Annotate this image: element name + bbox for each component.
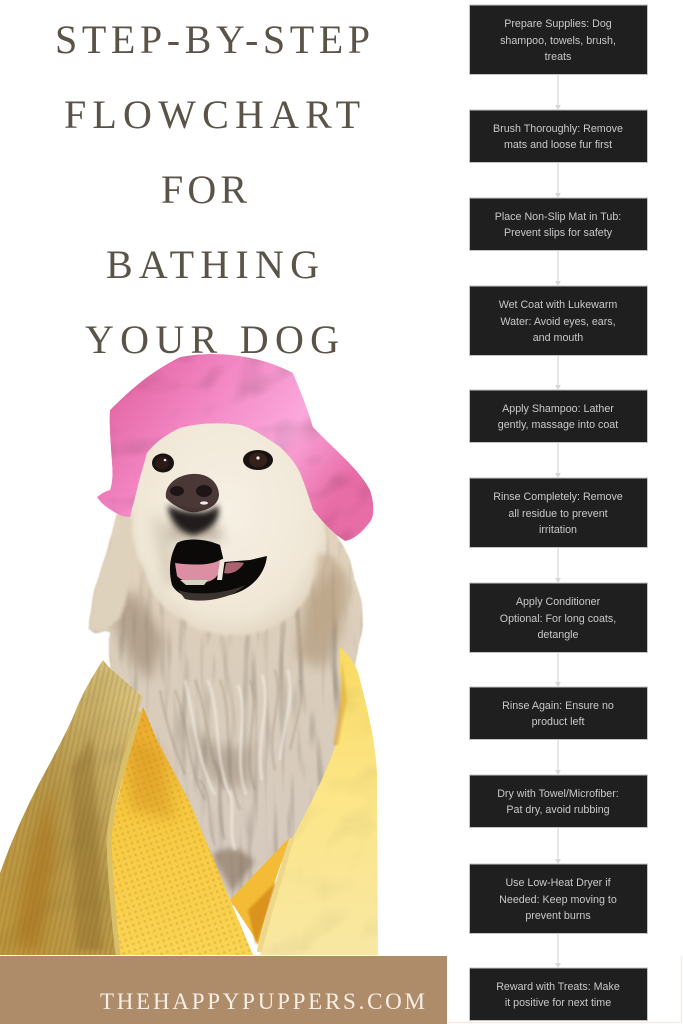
step 1: Prepare Supplies: Dog xyxy=(504,18,612,30)
step 5: Apply Shampoo: Lather xyxy=(502,403,614,415)
step 3 xyxy=(470,198,648,250)
arrow 4 xyxy=(555,356,561,390)
right towel xyxy=(260,647,378,955)
step 8 xyxy=(470,687,648,740)
shower cap xyxy=(97,354,373,541)
step 8: Rinse Again: Ensure no xyxy=(502,700,614,712)
arrow 1 xyxy=(555,75,561,110)
arrow 5 xyxy=(555,443,561,478)
nose xyxy=(166,474,219,535)
step 11: Reward with Treats: Make xyxy=(496,981,620,993)
step 1: treats xyxy=(545,51,571,63)
step 6: Rinse Completely: Remove xyxy=(493,491,623,503)
arrow 2 xyxy=(555,163,561,198)
fur body xyxy=(90,510,364,905)
step 4: and mouth xyxy=(533,332,583,344)
mouth xyxy=(170,539,267,601)
head xyxy=(92,404,350,640)
step 4: Water: Avoid eyes, ears, xyxy=(500,316,616,328)
title: YOUR DOG xyxy=(85,317,339,362)
title: STEP-BY-STEP xyxy=(55,17,370,62)
step 2: mats and loose fur first xyxy=(504,139,612,151)
footer band xyxy=(0,956,447,1024)
step 6 xyxy=(470,478,648,548)
illustration: dog in shower cap and yellow towel xyxy=(0,354,378,955)
step 11: it positive for next time xyxy=(505,997,611,1009)
left towel xyxy=(0,660,143,955)
step 10 xyxy=(470,864,648,934)
arrow 6 xyxy=(555,548,561,583)
step 2 xyxy=(470,110,648,162)
step 7: Optional: For long coats, xyxy=(500,613,616,625)
arrow 7 xyxy=(555,653,561,687)
step 7: Apply Conditioner xyxy=(516,596,601,608)
step 4: Wet Coat with Lukewarm xyxy=(499,299,617,311)
arrow 9 xyxy=(555,828,561,864)
step 2: Brush Thoroughly: Remove xyxy=(493,123,623,135)
step 10: prevent burns xyxy=(525,910,591,922)
step 9 xyxy=(470,775,648,828)
arrow 10 xyxy=(555,934,561,968)
title: FLOWCHART xyxy=(64,92,360,137)
step 5: gently, massage into coat xyxy=(498,419,618,431)
arrow 8 xyxy=(555,740,561,775)
title: BATHING xyxy=(106,242,319,287)
step 11 xyxy=(470,968,648,1020)
edge line xyxy=(448,956,682,1022)
step 7 xyxy=(470,583,648,652)
front yellow strap xyxy=(110,707,253,955)
step 3: Place Non-Slip Mat in Tub: xyxy=(495,211,621,223)
footer band: THEHAPPYPUPPERS.COM xyxy=(100,989,425,1014)
step 6: irritation xyxy=(539,524,577,536)
inner fold xyxy=(230,837,290,945)
step 1: shampoo, towels, brush, xyxy=(500,35,616,47)
step 10: Use Low-Heat Dryer if xyxy=(505,877,611,889)
right eye xyxy=(243,450,273,470)
step 3: Prevent slips for safety xyxy=(504,227,613,239)
step 4 xyxy=(470,286,648,356)
arrow 3 xyxy=(555,251,561,286)
step 6: all residue to prevent xyxy=(508,508,608,520)
left eye xyxy=(152,454,174,472)
step 10: Needed: Keep moving to xyxy=(499,894,617,906)
title: FOR xyxy=(161,167,247,212)
step 7: detangle xyxy=(537,629,579,641)
step 9: Dry with Towel/Microfiber: xyxy=(497,788,619,800)
title xyxy=(55,17,370,362)
step 9: Pat dry, avoid rubbing xyxy=(506,804,610,816)
towel xyxy=(0,647,378,955)
flowchart xyxy=(470,5,648,1020)
step 1 xyxy=(470,5,648,74)
step 5 xyxy=(470,390,648,442)
step 8: product left xyxy=(532,716,584,728)
